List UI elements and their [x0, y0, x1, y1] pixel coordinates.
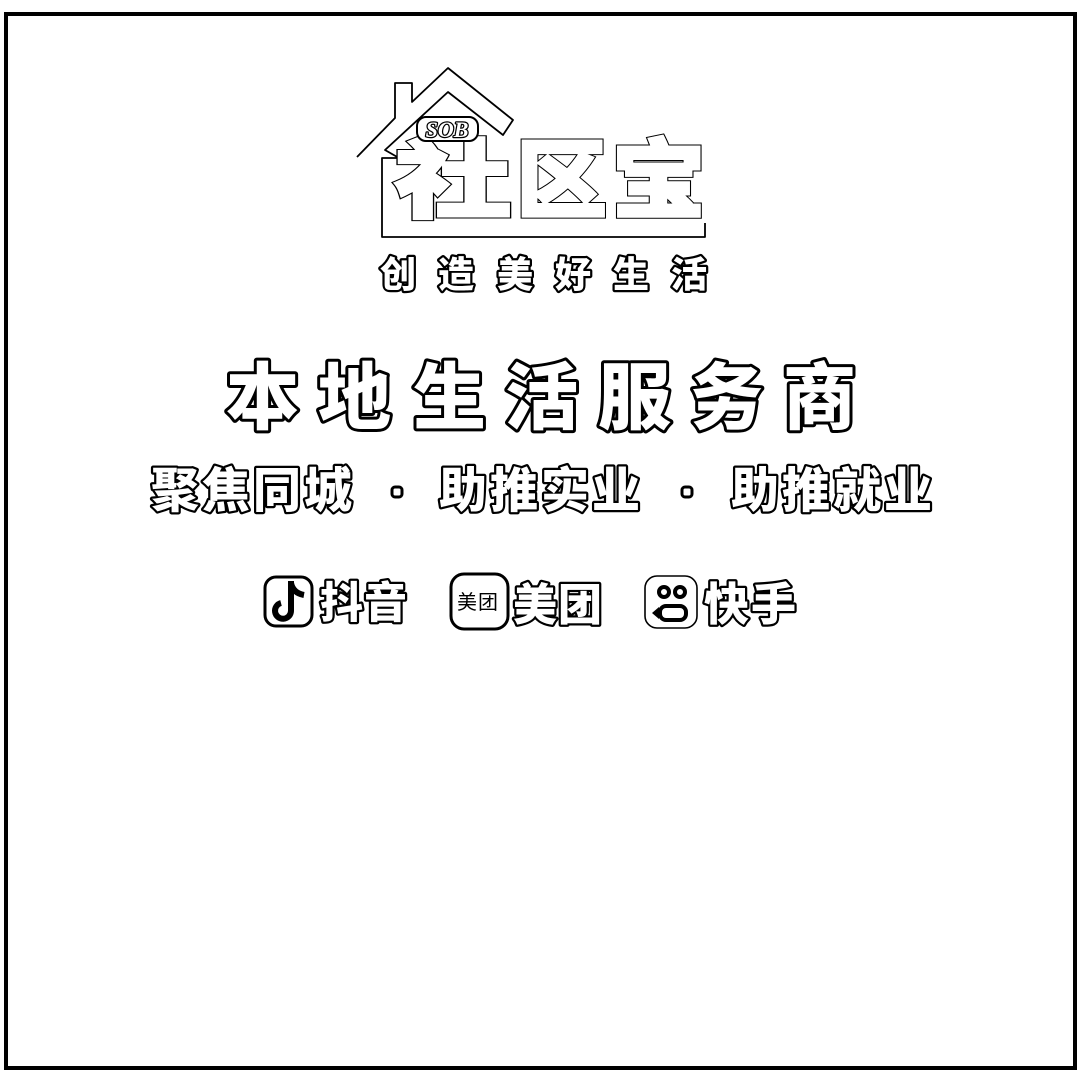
label: 快手: 快手 — [704, 579, 796, 630]
platform: Kuaishou — [645, 576, 796, 630]
label: 美团: 美团 — [513, 581, 602, 630]
logo: SOB community house — [357, 68, 705, 237]
icon: Meituan app — [451, 574, 508, 629]
logo badge: SOB: SOB — [426, 117, 468, 142]
icon: house outline — [357, 68, 705, 237]
platform: Douyin — [265, 577, 407, 628]
logo wordmark: 区 — [517, 135, 606, 228]
logo wordmark: 社 — [396, 135, 510, 228]
icon: Kuaishou camera — [645, 576, 697, 628]
logo wordmark: 社 — [396, 135, 510, 228]
subtitle: 助推实业: 助推实业 — [439, 464, 640, 518]
icon: Douyin note — [265, 577, 312, 626]
logo wordmark: 宝 — [613, 134, 705, 228]
subtitle: 助推就业: 助推就业 — [731, 465, 932, 518]
separator dot — [392, 487, 402, 497]
logo tagline: 创造美好生活 — [380, 254, 707, 295]
main title: 本地生活服务商 — [226, 358, 856, 439]
platform: Meituan — [451, 574, 602, 630]
subtitle: 聚焦同城: 聚焦同城 — [151, 465, 352, 518]
logo wordmark — [396, 134, 705, 228]
label: 抖音: 抖音 — [320, 580, 407, 628]
logo wordmark: 宝 — [613, 134, 705, 228]
separator dot — [682, 487, 692, 497]
icon: Meituan app: 美团 — [457, 591, 498, 614]
logo wordmark: 区 — [517, 135, 606, 228]
